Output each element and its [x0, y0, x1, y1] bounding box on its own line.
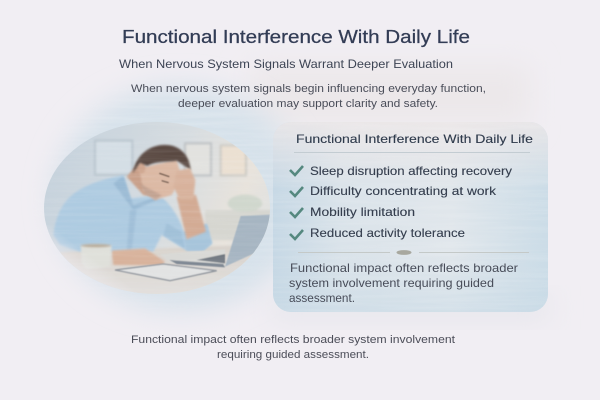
- checklist item 4: Reduced activity tolerance: [310, 226, 465, 240]
- panel note: Functional impact often reflects broader: [290, 262, 518, 275]
- brow and eyes: [159, 173, 169, 183]
- panel note: assessment.: [289, 292, 355, 305]
- streak texture over the illustration: [130, 150, 224, 266]
- stubble: [142, 185, 161, 200]
- ornamental divider: [298, 250, 529, 255]
- lower-left fade: [50, 234, 109, 286]
- neck: [126, 164, 149, 196]
- hair: [133, 145, 191, 173]
- panel heading: Functional Interference With Daily Life: [296, 132, 533, 146]
- panel note: [289, 262, 518, 305]
- hand on head: [173, 168, 195, 200]
- closing note: [131, 334, 456, 361]
- intro text: [131, 83, 486, 110]
- laptop: [160, 215, 272, 267]
- panel note: system involvement requiring guided: [289, 277, 494, 290]
- background: [50, 78, 510, 317]
- panel: functional interference checklist: [273, 122, 548, 312]
- shirt: [53, 175, 212, 252]
- mug: [81, 244, 112, 269]
- intro text: deeper evaluation may support clarity and safety.: [178, 98, 438, 110]
- intro text: When nervous system signals begin influencing everyday function,: [131, 83, 486, 95]
- subtitle: When Nervous System Signals Warrant Deeper Evaluation: [119, 58, 453, 71]
- panel background: [273, 122, 548, 312]
- checklist item 1: Sleep disruption affecting recovery: [310, 164, 512, 178]
- ear: [138, 161, 146, 173]
- illustration: man at laptop in oval vignette: [40, 120, 275, 300]
- notebook: [115, 264, 217, 281]
- title: Functional Interference With Daily Life: [122, 26, 470, 47]
- closing note: Functional impact often reflects broader system involvement: [131, 334, 456, 346]
- face: [139, 159, 182, 200]
- wall frames and plant: [95, 141, 272, 240]
- forearm and hand on desk: [112, 248, 165, 266]
- desk: [62, 246, 252, 293]
- closing note: requiring guided assessment.: [217, 349, 369, 361]
- checklist item 2: Difficulty concentrating at work: [310, 184, 497, 198]
- oval backdrop: [44, 122, 270, 252]
- raised forearm: [177, 195, 206, 239]
- checklist item 3: Mobility limitation: [310, 205, 415, 219]
